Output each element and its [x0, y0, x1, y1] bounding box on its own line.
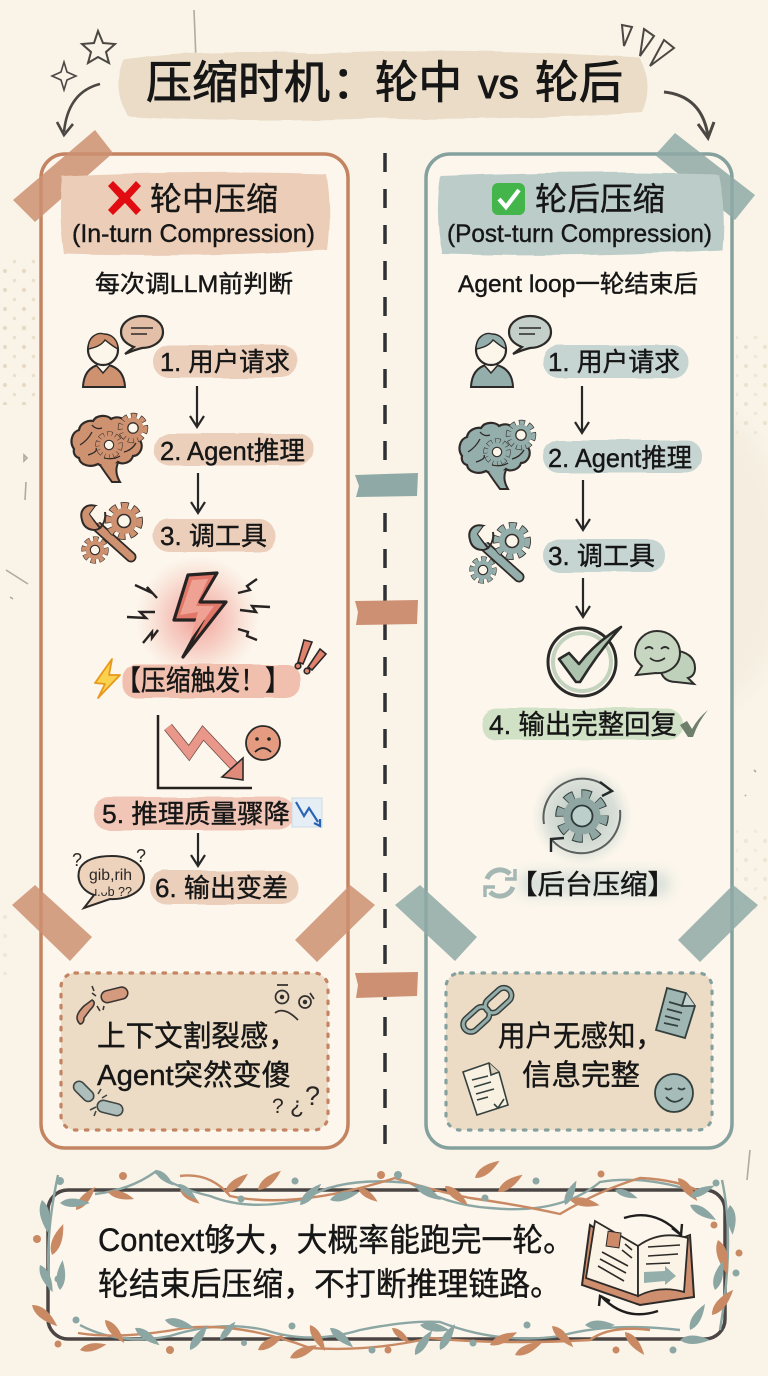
header: post-turn [437, 172, 723, 255]
title: ： [332, 57, 377, 108]
step 2: 2. Agent推理 [160, 436, 305, 466]
trigger timing text: Agent loop一轮结束后 [458, 271, 698, 298]
arrow [576, 578, 590, 617]
icon: garbled speech bubble: ? [136, 846, 146, 866]
icon: small yellow bolt [95, 659, 120, 698]
decoration: burst and right curved arrow [622, 25, 714, 138]
compression triggered: 【压缩触发！】 [116, 665, 290, 696]
callout: in-turn downside: 上下文割裂感， [97, 1020, 297, 1053]
icon: lightning bolt with sparks [127, 556, 270, 680]
icon: user [471, 316, 551, 387]
arrow [191, 833, 205, 866]
question marks [272, 1081, 320, 1118]
tape: top left [13, 130, 113, 222]
icon: chart emoji [292, 798, 322, 827]
icon: exclamation marks [295, 640, 326, 674]
icon: open book with cycle arrows [582, 1215, 694, 1314]
title: vs [478, 60, 519, 107]
center tape: teal [355, 473, 418, 497]
icon: brain with gears [72, 416, 145, 482]
callout: post-turn benefit: 用户无感知， [498, 1020, 663, 1053]
icon: broken chain top [77, 986, 129, 1024]
question marks: ? [305, 1081, 320, 1111]
header: post-turn: (Post-turn Compression) [447, 220, 712, 248]
icon: gear with cycle arrows [532, 766, 632, 866]
header: in-turn [60, 172, 329, 255]
icon: green tick [680, 710, 708, 737]
arrow [190, 386, 204, 427]
icon: confused face [275, 985, 314, 1020]
icon: chain [460, 985, 515, 1035]
question marks: ? [272, 1095, 284, 1118]
icon: sad face [246, 726, 280, 760]
background compression: 【后台压缩】 [510, 870, 675, 900]
step 3: 3. 调工具 [160, 521, 267, 551]
center dashed divider [383, 153, 387, 1152]
icon: garbled speech bubble [72, 846, 146, 908]
step 2: 2. Agent推理 [548, 443, 692, 473]
arrow [576, 480, 590, 530]
step 1: 1. 用户请求 [160, 347, 290, 377]
icon: check circle [548, 627, 621, 696]
title: 压缩时机 [146, 57, 330, 108]
center tape: orange lower [355, 972, 418, 998]
arrow [191, 473, 205, 513]
icon: smile face [655, 1074, 693, 1112]
callout: post-turn benefit: 信息完整 [522, 1059, 640, 1092]
header: in-turn: (In-turn Compression) [72, 220, 315, 248]
icon: document bottom [463, 1063, 508, 1115]
callout: post-turn benefit [446, 973, 712, 1130]
step 3: 3. 调工具 [548, 541, 655, 571]
chart: quality drop [158, 715, 280, 788]
icon: garbled speech bubble: ɹ.ᴗb ?? [93, 884, 132, 899]
tape: bottom right [295, 885, 375, 962]
vine border [29, 1157, 742, 1362]
icon: wrench and gears [469, 525, 528, 581]
title: 轮中 [375, 57, 462, 108]
tape: bottom right [678, 885, 758, 962]
panel: conclusion [29, 1157, 742, 1362]
tape: bottom left [395, 885, 477, 961]
conclusion text: Context够大，大概率能跑完一轮。 [98, 1222, 574, 1258]
icon: broken chain bottom [71, 1079, 124, 1117]
icon: red cross [108, 181, 141, 215]
header: post-turn: 轮后压缩 [535, 181, 665, 217]
icon: garbled speech bubble: ? [72, 850, 82, 870]
icon: smiling chat bubbles [635, 631, 695, 684]
header: in-turn: 轮中压缩 [150, 181, 278, 217]
step 6: 6. 输出变差 [155, 873, 288, 903]
decoration: stars and left curved arrow [52, 31, 115, 135]
callout: in-turn downside [61, 973, 328, 1130]
icon: document top [656, 988, 695, 1038]
tape: bottom left [12, 885, 92, 961]
step 5: 5. 推理质量骤降 [102, 799, 290, 829]
compression triggered [95, 640, 326, 698]
panel: post-turn compression [395, 133, 758, 1148]
center tape: orange middle [355, 600, 418, 625]
question marks: ¿ [290, 1092, 304, 1118]
tape: top right [655, 133, 755, 220]
step 4: 4. 输出完整回复 [489, 710, 677, 740]
conclusion text [98, 1222, 574, 1302]
trigger timing text: 每次调LLM前判断 [95, 271, 293, 298]
title [119, 51, 648, 121]
arrow [575, 386, 589, 433]
icon: refresh [485, 869, 515, 897]
step 1: 1. 用户请求 [548, 347, 680, 377]
conclusion text: 轮结束后压缩，不打断推理链路。 [98, 1266, 561, 1302]
icon: brain with gears [460, 423, 533, 489]
title: 轮后 [535, 57, 623, 108]
icon: garbled speech bubble: gib,rih [89, 867, 132, 884]
callout: in-turn downside: Agent突然变傻 [97, 1059, 291, 1092]
icon: wrench and gears [81, 505, 140, 561]
icon: green check [492, 183, 525, 215]
panel: in-turn compression [12, 130, 375, 1148]
icon: user [83, 316, 163, 387]
